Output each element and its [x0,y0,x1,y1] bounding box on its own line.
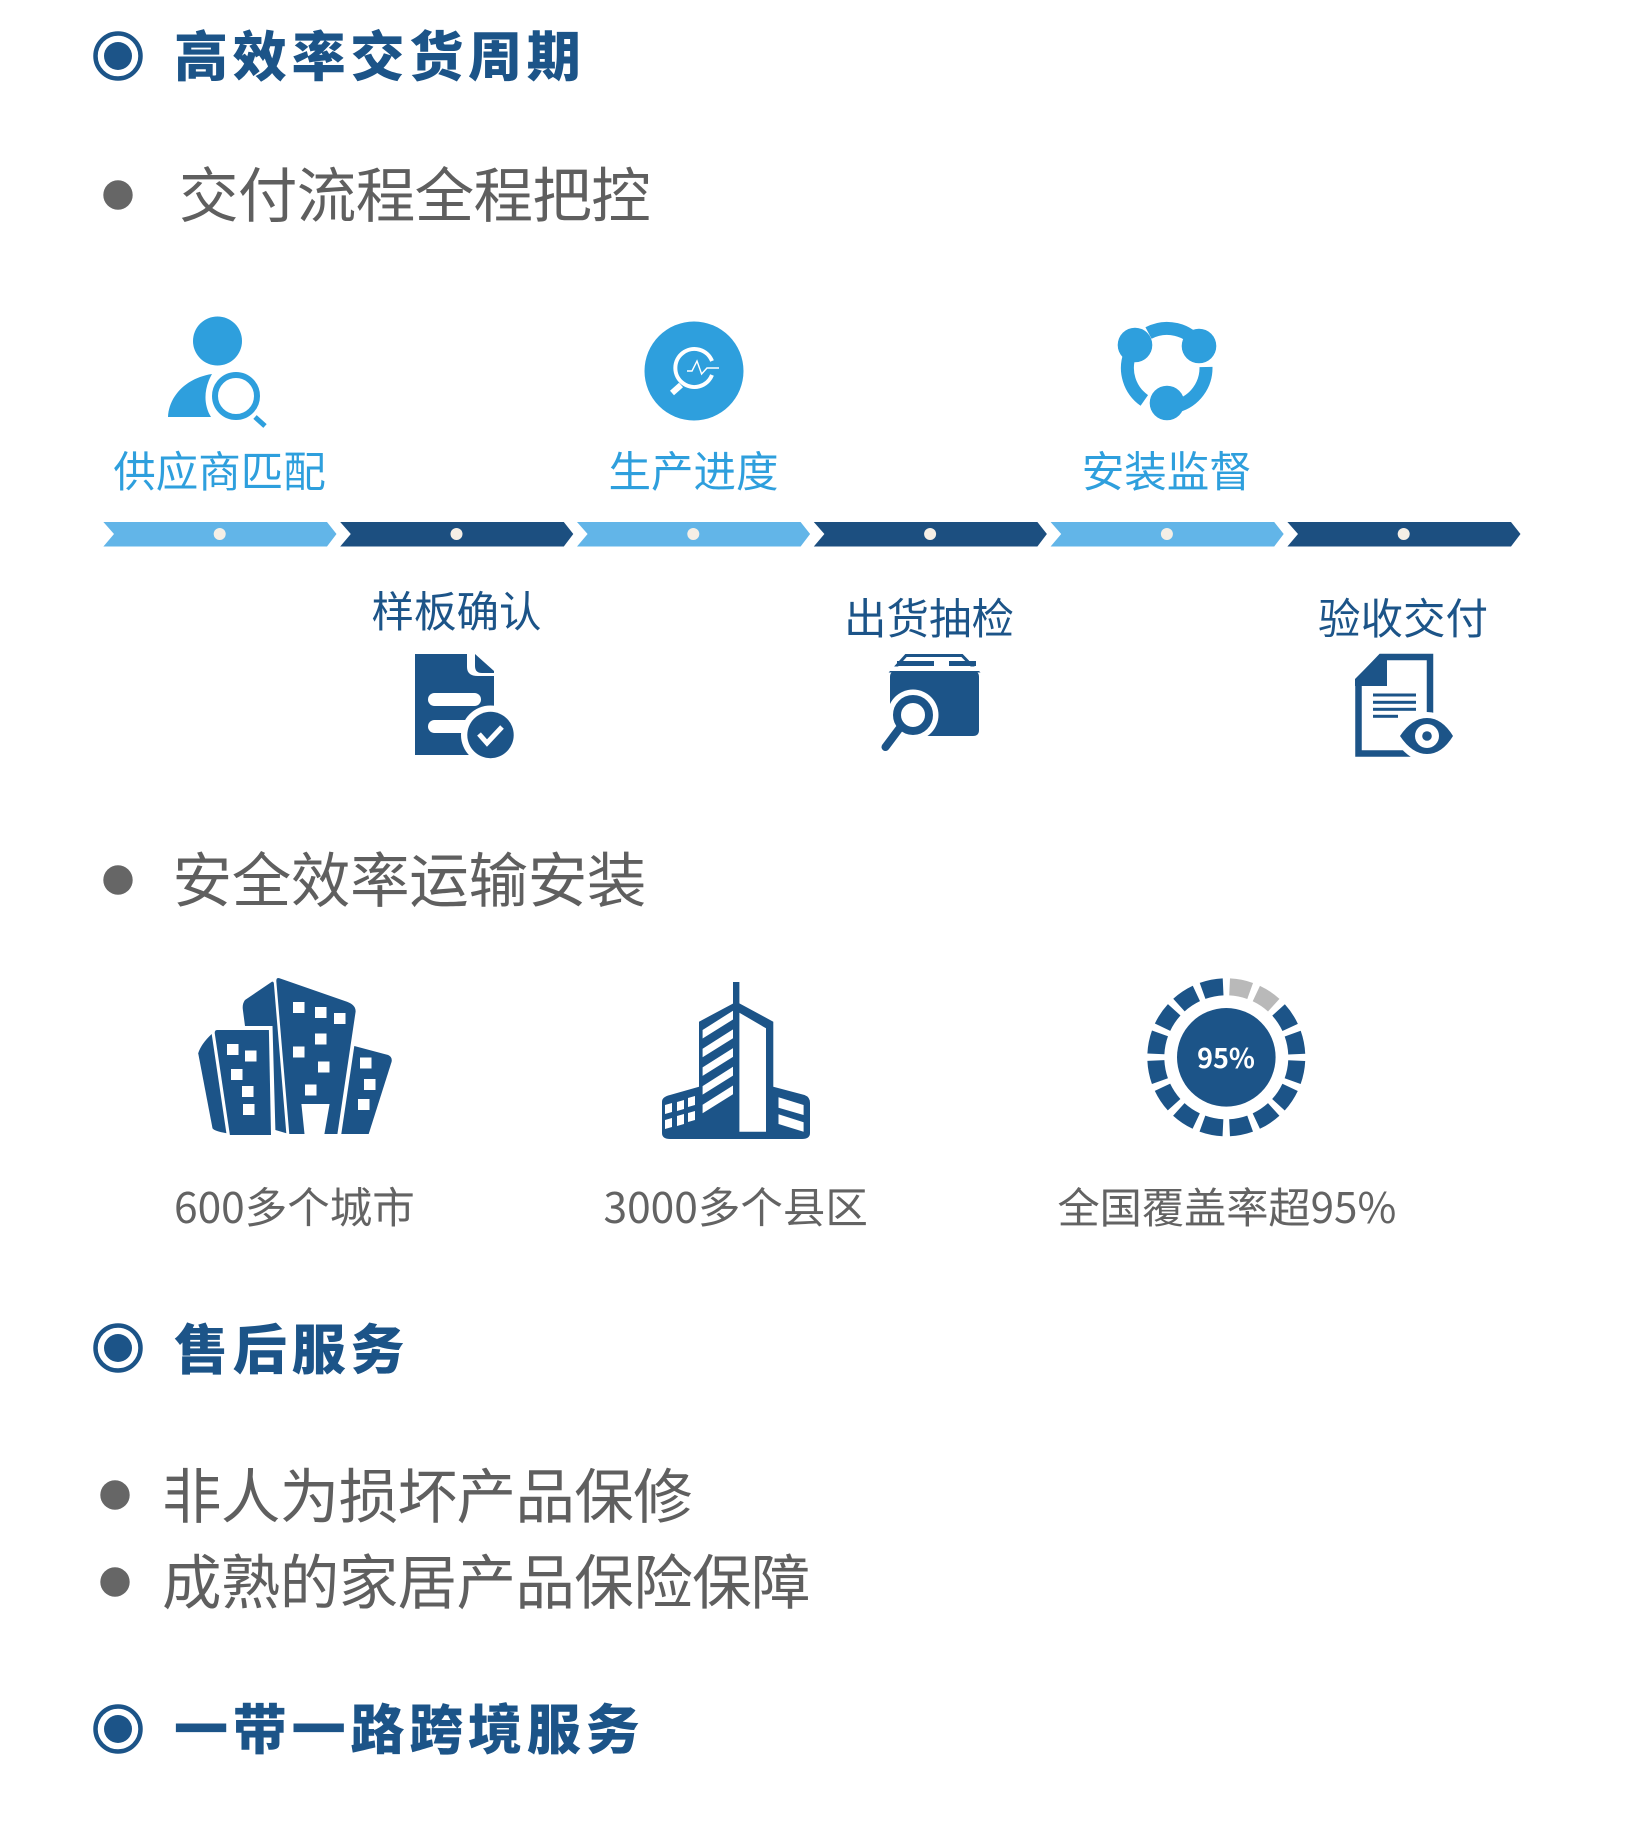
label: 3000+ counties: 3000多个县区 [604,1175,868,1236]
step: acceptance delivery, label and icon [1318,586,1488,762]
heading: high-efficiency delivery cycle: 高效率交货周期 [174,13,586,92]
subheading: safe and efficient transport and installation: 安全效率运输安装 [172,834,646,920]
step: acceptance delivery, label and icon: 验收交付 [1318,586,1488,647]
stat: counties [604,982,868,1236]
chart: 95% progress ring: 95% [1197,1037,1255,1076]
stat: cities [174,978,415,1236]
bullet: warranty for non-human damage: 非人为损坏产品保修 [162,1450,692,1536]
subheading: delivery process control: 交付流程全程把控 [179,149,650,235]
step: production progress, icon and label: 生产进度 [608,439,779,500]
step: supplier matching, icon and label: 供应商匹配 [113,439,326,500]
step: sample confirmation, label and icon: 样板确认 [371,579,542,640]
step: installation supervision, icon and label: 安装监督 [1082,439,1252,500]
label: 600+ cities: 600多个城市 [174,1175,415,1236]
icon: city skyline [198,978,392,1135]
icon: office tower [662,982,810,1139]
step: supplier matching, icon and label [113,316,326,500]
step: shipment inspection, label and icon: 出货抽检 [844,586,1014,647]
process timeline [103,316,1520,764]
chart: 95% progress ring [1156,987,1297,1128]
stat: national coverage [1058,987,1396,1236]
step: installation supervision, icon and label [1082,328,1252,500]
step: shipment inspection, label and icon [844,586,1014,747]
step: production progress, icon and label [608,322,779,500]
chevron arrow bar [103,522,1520,546]
heading: after-sales service: 售后服务 [174,1306,409,1385]
step: sample confirmation, label and icon [371,579,542,764]
heading: belt and road cross-border service: 一带一路跨境服务 [174,1686,644,1765]
label: coverage above 95%: 全国覆盖率超95% [1058,1175,1396,1236]
bullet: insurance for home products: 成熟的家居产品保险保障 [162,1536,810,1622]
